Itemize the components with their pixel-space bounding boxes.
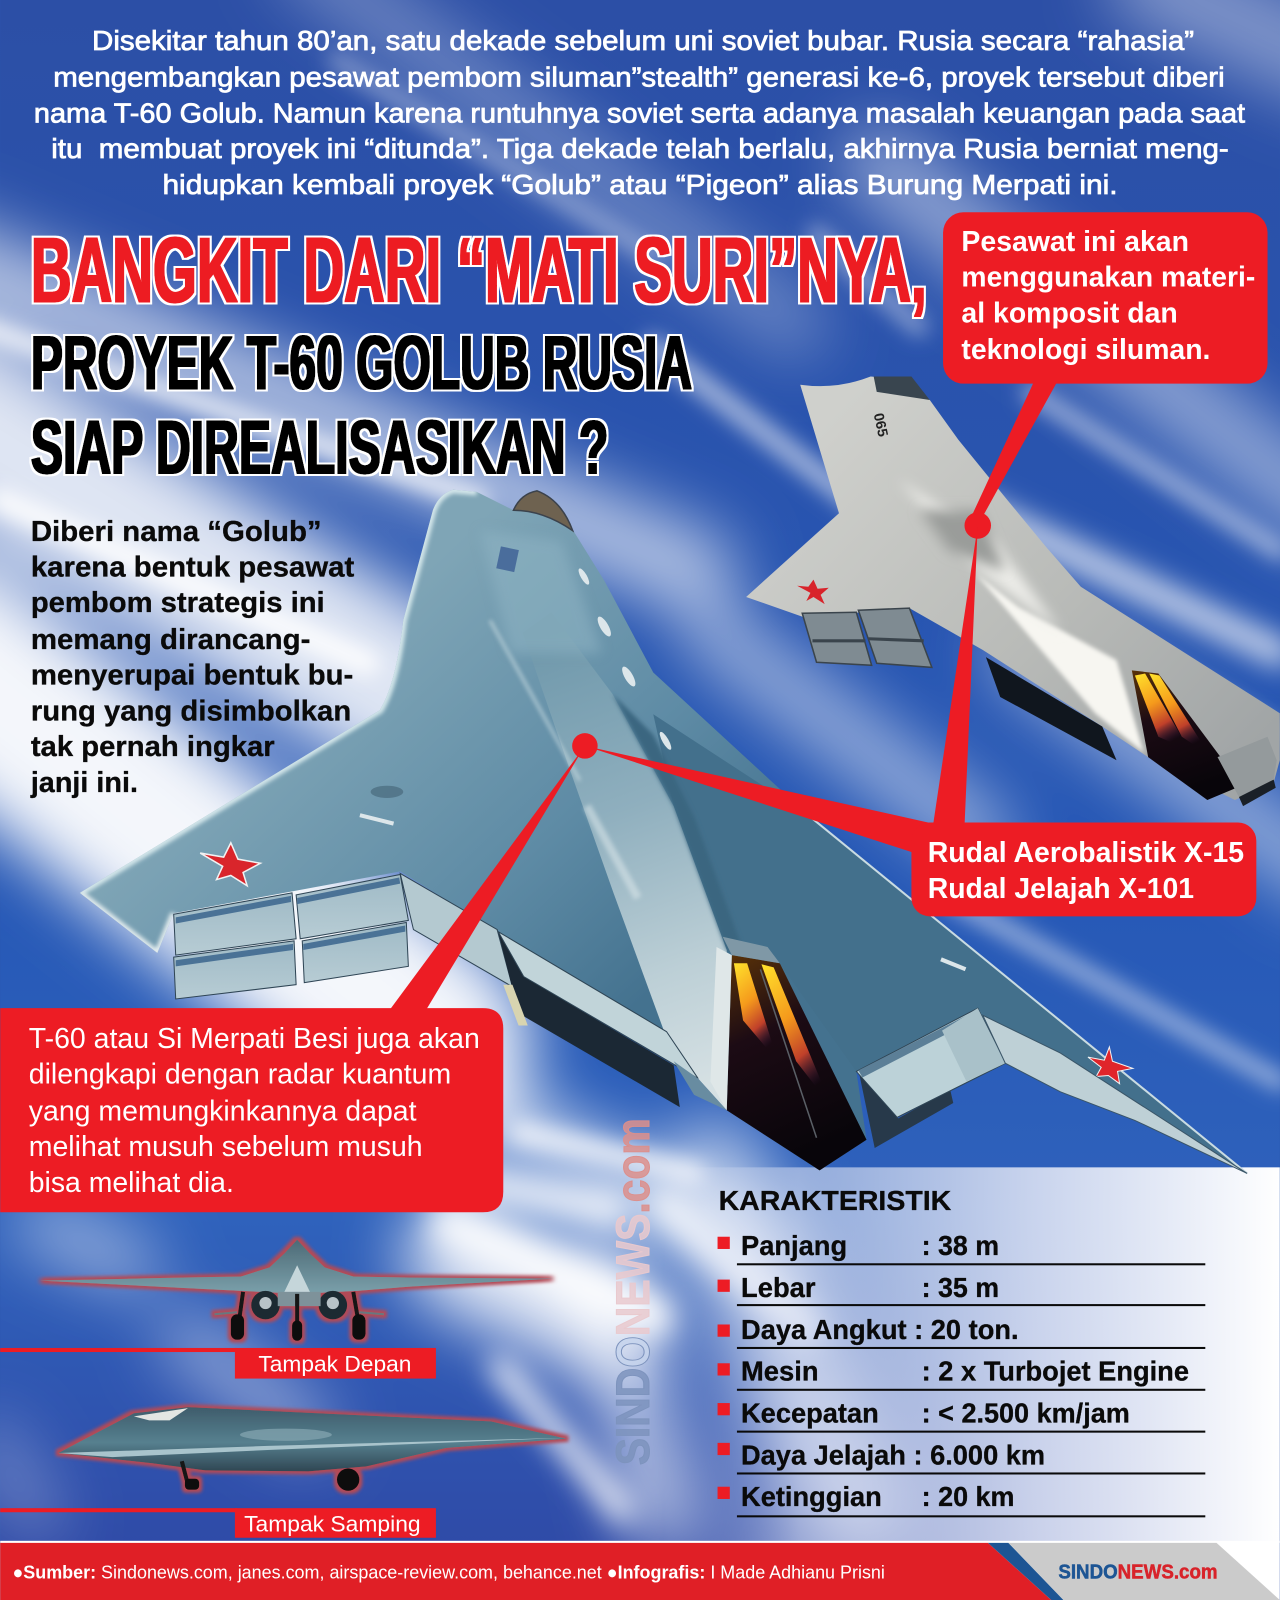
central spine — [538, 656, 727, 1110]
small rear aircraft — [746, 377, 1280, 806]
row: lebar: : 35 m — [922, 1272, 999, 1303]
golub description: memang dirancang- — [31, 624, 310, 656]
airframe — [80, 490, 1247, 1173]
row: panjang: : 38 m — [922, 1230, 999, 1261]
table heading: KARAKTERISTIK — [719, 1185, 951, 1216]
row: mesin: : 2 x Turbojet Engine — [922, 1356, 1189, 1387]
bay doors — [802, 608, 932, 667]
right flaps — [859, 1074, 953, 1148]
title — [31, 218, 927, 490]
row: kecepatan: : < 2.500 km/jam — [922, 1397, 1130, 1428]
intro paragraph — [34, 25, 1245, 200]
airframe — [746, 377, 1280, 800]
row: mesin — [718, 1356, 1205, 1391]
row: lebar — [718, 1272, 1205, 1306]
sensor marks — [359, 567, 966, 971]
front view label — [0, 1348, 436, 1379]
row: panjang: Panjang — [741, 1230, 847, 1261]
side view label — [0, 1508, 436, 1538]
front view aircraft — [40, 1240, 553, 1341]
flap strip — [400, 873, 512, 987]
characteristics table — [718, 1185, 1205, 1517]
row: kecepatan — [718, 1397, 1205, 1433]
callout: missiles: Rudal Aerobalistik X-15 — [928, 837, 1244, 869]
callout: quantum radar: yang memungkinkannya dapat — [29, 1095, 417, 1127]
row: daya jelajah: Daya Jelajah : 6.000 km — [741, 1439, 1045, 1470]
callout: quantum radar: T-60 atau Si Merpati Besi juga akan — [29, 1023, 480, 1055]
main aircraft — [80, 490, 1247, 1173]
cockpit — [874, 377, 930, 400]
row: kecepatan: Kecepatan — [741, 1397, 879, 1428]
characteristics panel background — [663, 1167, 1280, 1543]
red star — [797, 580, 829, 604]
side view aircraft — [58, 1407, 567, 1491]
title line 3: SIAP DIREALISASIKAN ? — [31, 405, 608, 490]
row: ketinggian — [718, 1481, 1205, 1517]
logo: SINDONEWS.com — [1058, 1562, 1218, 1584]
source credits: ●Sumber: Sindonews.com, janes.com, airspace-review.com, behance.net ●Infografis: I Made Adhianu Prisni — [12, 1562, 885, 1583]
left flaps — [174, 874, 408, 999]
intro paragraph: nama T-60 Golub. Namun karena runtuhnya soviet serta adanya masalah keuangan pada saat — [34, 97, 1245, 128]
front view label: Tampak Depan — [258, 1351, 411, 1376]
callout: quantum radar: melihat musuh sebelum musuh — [29, 1131, 423, 1163]
callout: composite material: Pesawat ini akan — [961, 226, 1189, 258]
callout: missiles: Rudal Jelajah X-101 — [928, 873, 1194, 905]
red star right — [1088, 1047, 1133, 1084]
callout: composite material: menggunakan materi- — [961, 262, 1255, 294]
weapons bay — [498, 932, 680, 1107]
golub description: menyerupai bentuk bu- — [31, 660, 353, 692]
leading edge line — [808, 815, 1247, 1173]
callout: quantum radar — [0, 733, 598, 1212]
row: panjang — [718, 1230, 1205, 1265]
callout: composite material — [943, 212, 1268, 539]
right wing tone — [654, 714, 782, 870]
wing smudge — [371, 786, 403, 798]
row: daya angkut: Daya Angkut : 20 ton. — [741, 1314, 1019, 1345]
side view label: Tampak Samping — [244, 1512, 421, 1537]
golub description: Diberi nama “Golub” — [31, 516, 322, 548]
fuselage number: 065 — [870, 412, 890, 438]
golub description: rung yang disimbolkan — [31, 695, 351, 727]
callout: quantum radar: dilengkapi dengan radar kuantum — [29, 1059, 451, 1091]
golub description: pembom strategis ini — [31, 587, 325, 619]
wing tip strip — [983, 1015, 1247, 1173]
row: ketinggian: : 20 km — [922, 1481, 1014, 1512]
intro paragraph: mengembangkan pesawat pembom siluman”stealth” generasi ke-6, proyek tersebut diberi — [53, 62, 1225, 93]
row: lebar: Lebar — [741, 1272, 816, 1303]
golub description: karena bentuk pesawat — [31, 552, 355, 584]
weapons bay — [986, 657, 1117, 760]
intro paragraph: itu membuat proyek ini “ditunda”. Tiga dekade telah berlalu, akhirnya Rusia berniat meng- — [51, 133, 1229, 164]
watermark: SINDONEWS.com — [607, 1118, 659, 1465]
row: ketinggian: Ketinggian — [741, 1481, 882, 1512]
exhaust — [1132, 670, 1239, 800]
callout: composite material: al komposit dan — [961, 297, 1178, 329]
callout: missiles — [585, 526, 1256, 916]
row: daya jelajah — [718, 1439, 1205, 1474]
golub description: janji ini. — [30, 767, 138, 799]
weapons bay door — [498, 932, 698, 1079]
red star left — [200, 843, 260, 886]
golub description: tak pernah ingkar — [31, 731, 275, 763]
title line 2: PROYEK T-60 GOLUB RUSIA — [31, 321, 692, 406]
callout: quantum radar: bisa melihat dia. — [29, 1167, 234, 1199]
nose highlight — [80, 490, 477, 893]
intro paragraph: Disekitar tahun 80’an, satu dekade sebelum uni soviet bubar. Rusia secara “rahasia” — [92, 25, 1194, 56]
callout: composite material: teknologi siluman. — [961, 334, 1210, 366]
footer — [0, 1541, 1280, 1600]
row: mesin: Mesin — [741, 1356, 819, 1387]
golub description — [30, 516, 355, 799]
tail flap — [1218, 737, 1277, 797]
row: daya angkut — [718, 1314, 1205, 1349]
cockpit canopy — [513, 491, 573, 531]
fuselage number — [496, 546, 519, 572]
exhaust — [727, 955, 867, 1170]
intro paragraph: hidupkan kembali proyek “Golub” atau “Pigeon” alias Burung Merpati ini. — [162, 169, 1118, 200]
